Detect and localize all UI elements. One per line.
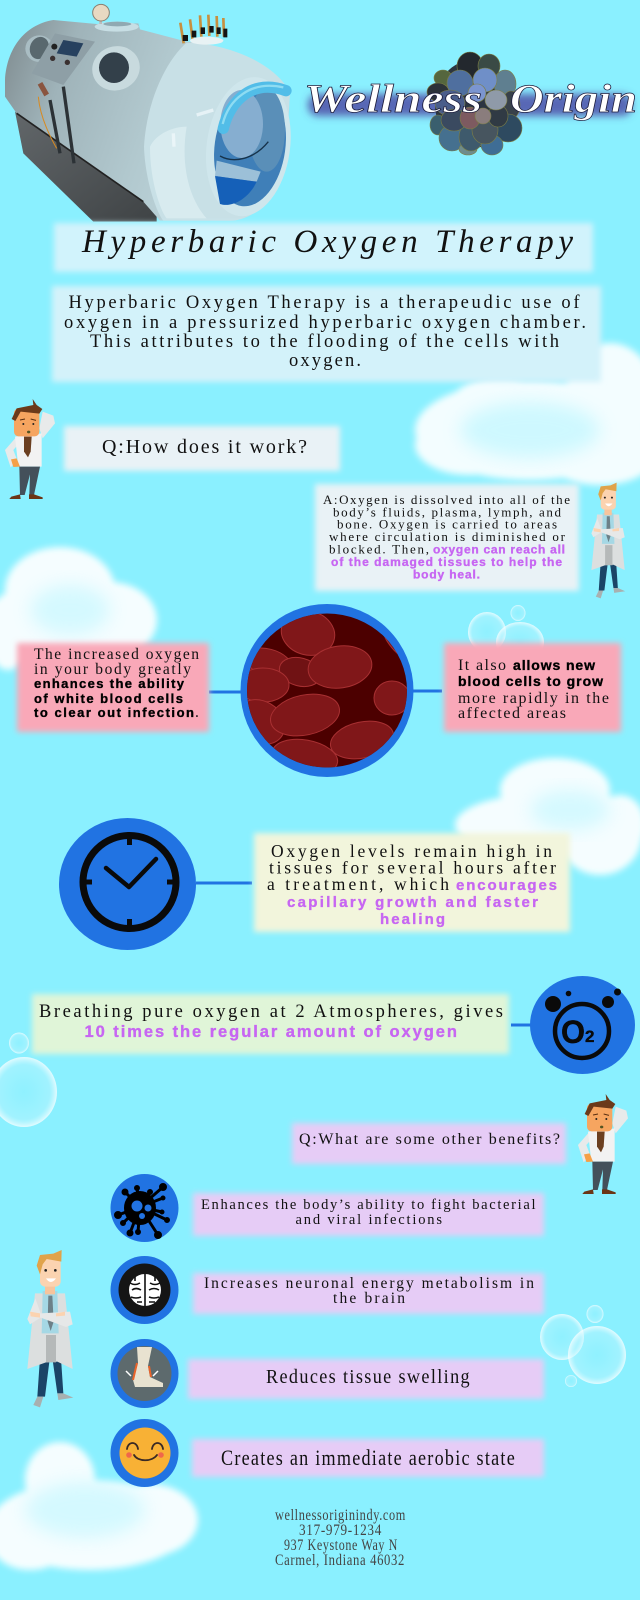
pink panel right text: It also [458,657,506,674]
oxygen levels text [267,841,557,928]
character: doctor 1 [591,483,625,598]
benefit text 2 [204,1275,534,1307]
footer contact: Carmel, Indiana 46032 [275,1552,405,1569]
connector right [412,690,442,692]
answer text: body heal. [413,568,480,582]
benefit panel 2 [193,1273,544,1314]
benefit panel 4 [192,1439,544,1477]
pure oxygen text [39,1002,503,1041]
pink panel left text: to clear out infection [34,705,194,720]
pink panel right text: more rapidly in the [458,690,609,707]
footer contact: 937 Keystone Way N [284,1537,398,1554]
question text: Q:How does it work? [102,436,307,458]
icon: brain [110,1256,178,1324]
logo succulent [427,52,522,155]
icon: virus [110,1174,178,1242]
benefit text 2: Increases neuronal energy metabolism in [204,1275,534,1292]
intro text: oxygen in a pressurized hyperbaric oxygen chamber. [64,313,586,333]
connector left [209,690,242,694]
question panel: other benefits [292,1123,566,1164]
pink panel right text: allows new [513,657,595,673]
logo glow [308,94,632,116]
panel: pure oxygen [32,994,509,1054]
blood cell circle [227,604,415,779]
answer text: oxygen can reach all [433,542,565,556]
intro text [64,293,586,371]
pink panel right [444,643,621,732]
oxygen levels text: healing [380,911,445,928]
connector: clock [196,882,252,884]
photo: hyperbaric chamber [5,4,299,222]
oxygen levels text: a treatment, which [267,874,449,894]
title: Hyperbaric Oxygen Therapy [81,224,573,260]
bubbles: left [0,1032,57,1127]
pink panel left text: enhances the ability [34,676,185,691]
intro text: Hyperbaric Oxygen Therapy is a therapeudic use of [68,293,580,313]
footer contact [275,1507,406,1569]
answer text: blocked. Then, [329,542,429,556]
intro text panel [52,286,601,382]
answer text: of the damaged tissues to help the [331,555,562,569]
panel: oxygen levels [254,833,570,932]
pure oxygen text: Breathing pure oxygen at 2 Atmospheres, gives [39,1002,503,1022]
pink panel right text: affected areas [458,705,566,722]
benefit text 1 [201,1197,536,1228]
answer text [323,492,570,582]
logo wordmark: Origin [510,76,637,121]
bubbles: lower right [540,1305,626,1387]
character: confused man 1 [5,399,55,499]
pink panel right text: blood cells to grow [458,673,603,689]
footer contact: 317-979-1234 [299,1522,382,1539]
footer contact: wellnessoriginindy.com [275,1507,406,1524]
cloud: bottom left [0,1442,198,1570]
pink panel left text: . [195,704,199,721]
benefit panel 3 [188,1359,544,1399]
cloud: upper right [415,343,640,485]
logo wordmark [304,76,637,121]
pink panel left text: The increased oxygen [34,646,199,663]
cloud: right middle [455,758,640,875]
answer text: body’s fluids, plasma, lymph, and [333,504,562,520]
icon: O2 molecule: 2 [585,1027,594,1046]
title panel [54,223,593,272]
intro text: oxygen. [289,351,361,371]
oxygen levels text: Oxygen levels remain high in [271,841,552,861]
pink panel left text [34,646,199,721]
intro text: This attributes to the flooding of the cells with [90,332,559,352]
question text: Q:What are some other benefits? [299,1131,560,1148]
question panel: how does it work [64,426,340,471]
answer text: where circulation is diminished or [329,529,566,544]
benefit panel 1 [193,1193,544,1236]
logo: Wellness Origin [304,52,637,155]
benefit text 3: Reduces tissue swelling [266,1366,471,1388]
benefit text 1: and viral infections [296,1212,442,1228]
character: confused man 2 [578,1094,628,1194]
bubbles: near blood cell circle [468,605,544,662]
benefit text 2: the brain [333,1290,405,1307]
icon: foot [110,1339,178,1408]
pink panel left text: of white blood cells [34,691,183,706]
character: doctor 2 [27,1250,73,1407]
icon: O2 molecule: O [561,1014,585,1050]
red blood cells [247,614,407,768]
icon: O2 molecule [530,976,635,1074]
pink panel left [17,643,209,732]
answer text: bone. Oxygen is carried to areas [337,517,557,532]
oxygen levels text: tissues for several hours after [269,858,556,878]
answer panel [315,484,579,591]
pink panel left text: in your body greatly [34,661,191,678]
icon: smiley face [110,1419,178,1487]
icon: clock [59,818,196,950]
benefit text 4: Creates an immediate aerobic state [221,1445,516,1470]
oxygen levels text: encourages [456,877,557,894]
connector: O2 [511,1024,532,1026]
cloud: left middle [0,547,157,670]
pure oxygen text: 10 times the regular amount of oxygen [84,1023,457,1041]
benefit text 1: Enhances the body’s ability to fight bacterial [201,1197,536,1213]
pink panel right text [458,657,609,722]
logo wordmark: Wellness [304,76,482,121]
oxygen levels text: capillary growth and faster [287,894,538,911]
answer text: A:Oxygen is dissolved into all of the [323,492,570,507]
